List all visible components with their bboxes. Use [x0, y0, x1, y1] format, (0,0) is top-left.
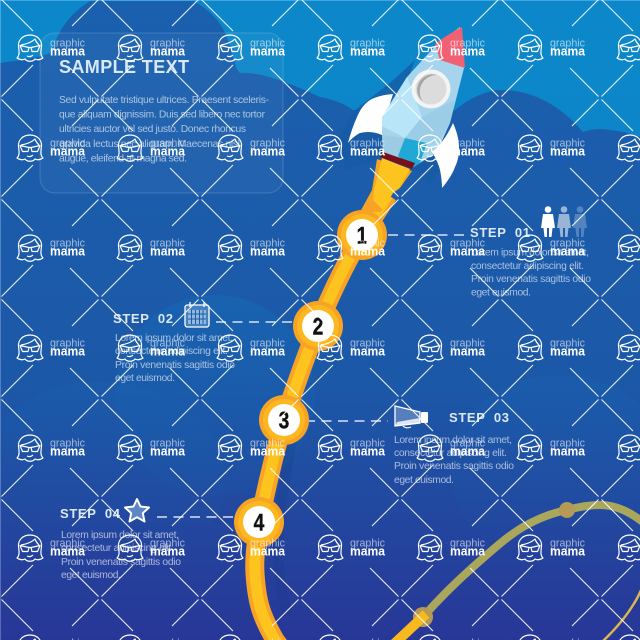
node 3	[259, 395, 309, 445]
step 04 text: consectetur adipiscing elit.	[61, 543, 174, 554]
step 01 text: Proin venenatis sagittis odio	[471, 274, 591, 285]
trail shadow	[278, 440, 292, 615]
step 03 text: consectetur adipiscing elit.	[394, 448, 507, 459]
step 04	[60, 499, 181, 581]
step 03 icon: megaphone	[395, 406, 428, 428]
step 02 text	[115, 333, 235, 384]
step 04 text: eget euismod.	[61, 570, 121, 581]
step 03 text: eget euismod.	[394, 475, 454, 486]
rocket trail	[255, 195, 388, 640]
step 01 text: eget euismod.	[471, 288, 531, 298]
panel body: augue, eleifend at magna sed.	[59, 154, 187, 164]
step 01 text: Lorem ipsum dolor sit amet,	[471, 248, 589, 258]
panel heading: SAMPLE TEXT	[59, 57, 189, 77]
window	[412, 70, 450, 108]
rocket body	[382, 27, 464, 168]
panel: sample text	[40, 33, 283, 193]
step 03 heading: STEP 03	[449, 410, 509, 425]
left fin	[348, 94, 393, 143]
right fin	[432, 123, 459, 188]
panel body: que aliquam dignissim. Duis sed libero nec tortor	[59, 110, 266, 120]
node 1	[337, 210, 387, 260]
rocket shadow	[340, 60, 440, 185]
panel body: gravida lectus nec aliquam. Maecenas nisl	[59, 139, 240, 150]
collar	[380, 152, 415, 169]
step 04 text: Lorem ipsum dolor sit amet,	[61, 530, 179, 541]
step 03 text: Lorem ipsum dolor sit amet,	[394, 435, 512, 446]
step 02 icon: calendar	[185, 302, 209, 327]
step 04 icon: star	[125, 499, 149, 522]
faded return arc	[394, 502, 640, 640]
step 02 text: Proin venenatis sagittis odio	[115, 360, 235, 371]
step 01 icon: people	[541, 206, 587, 237]
node 2: 2	[313, 312, 323, 340]
step 04 text	[61, 530, 181, 581]
step 02 heading: STEP 02	[113, 311, 173, 326]
exhaust nozzle	[360, 159, 412, 212]
connector dashes	[157, 235, 466, 517]
step 02 text: eget euismod.	[115, 373, 175, 384]
step 03 text	[394, 435, 514, 486]
step 01 text	[471, 248, 591, 298]
step 03 text: Proin venenatis sagittis odio	[394, 461, 514, 472]
step 02	[113, 302, 235, 384]
node 3: 3	[279, 406, 289, 434]
step 04 text: Proin venenatis sagittis odio	[61, 557, 181, 568]
step 03	[394, 406, 514, 486]
step 01 heading: STEP 01	[470, 225, 530, 240]
step 01 text: consectetur adipiscing elit.	[471, 261, 584, 272]
node 2	[293, 301, 343, 351]
panel body	[59, 95, 269, 164]
step 01	[470, 206, 591, 298]
panel body: ultricies auctor vel sed justo. Donec rhoncus	[59, 124, 246, 135]
step 02 text: consectetur adipiscing elit.	[115, 346, 228, 357]
panel body: Sed vulputate tristique ultrices. Praesent sceleris-	[59, 95, 269, 106]
rocket	[340, 27, 465, 212]
node 4: 4	[254, 508, 264, 536]
step 02 text: Lorem ipsum dolor sit amet,	[115, 333, 233, 344]
step 04 heading: STEP 04	[60, 506, 121, 521]
node 4	[234, 497, 284, 547]
nose cone	[435, 27, 465, 68]
node 1: 1	[357, 221, 367, 249]
